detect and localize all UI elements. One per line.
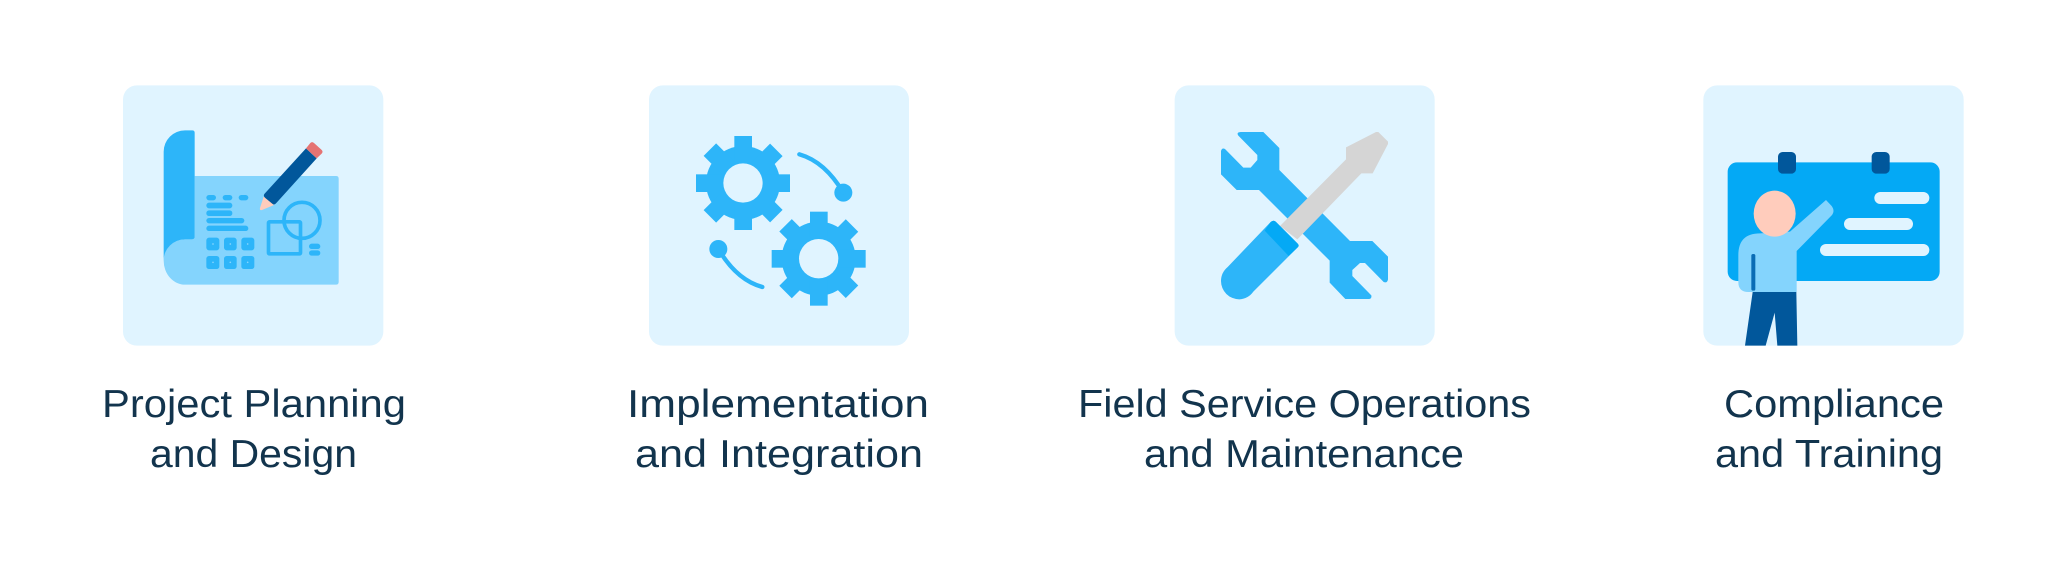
- heading: compliance and training: [1715, 383, 1944, 476]
- panel: compliance and training: [1703, 85, 1964, 476]
- heading: field service operations and maintenance: and Maintenance: [1144, 433, 1464, 476]
- heading: implementation and integration: Implementation: [627, 383, 929, 426]
- heading: field service operations and maintenance: Field Service Operations: [1078, 383, 1531, 426]
- heading: field service operations and maintenance: [1078, 383, 1531, 476]
- heading: compliance and training: and Training: [1715, 433, 1943, 476]
- icon: blueprint and pencil: [123, 85, 383, 346]
- icon: trainer at board: [1703, 85, 1964, 346]
- icon: gears: [649, 85, 909, 346]
- heading: project planning and design: Project Planning: [102, 383, 406, 426]
- heading: project planning and design: and Design: [150, 433, 357, 476]
- heading: implementation and integration: [627, 383, 929, 476]
- heading: implementation and integration: and Integration: [635, 433, 923, 476]
- panel: implementation and integration: [627, 85, 929, 476]
- heading: compliance and training: Compliance: [1724, 383, 1944, 426]
- icon: wrench and screwdriver: [1175, 85, 1435, 346]
- panel: field service operations and maintenance: [1078, 85, 1531, 476]
- heading: project planning and design: [102, 383, 406, 476]
- panel: project planning and design: [102, 85, 406, 476]
